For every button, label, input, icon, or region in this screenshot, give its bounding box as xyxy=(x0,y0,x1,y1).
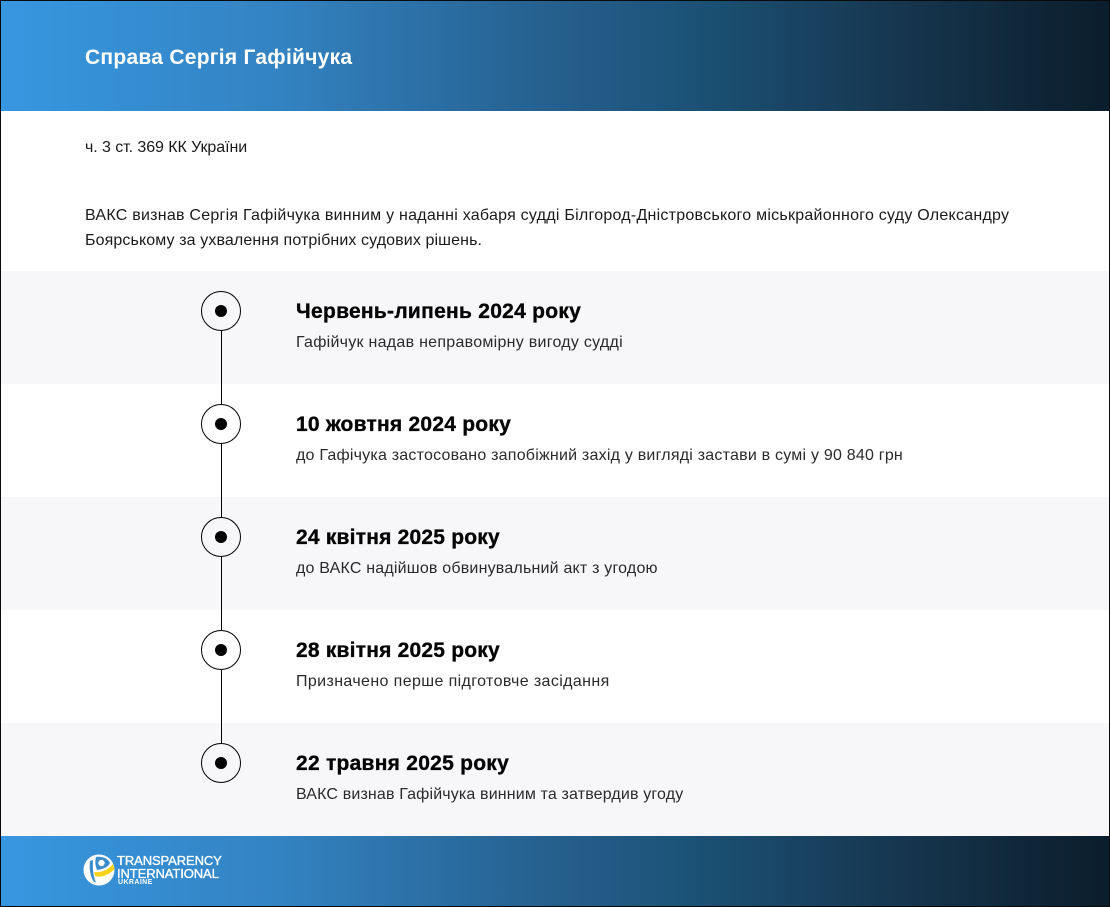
band: row 5 background xyxy=(0,723,1110,836)
timeline event 1 xyxy=(201,291,623,351)
icon: logo globe xyxy=(84,854,114,886)
legal article reference: ч. 3 ст. 369 КК України xyxy=(85,139,247,156)
footer banner xyxy=(0,836,1110,907)
event 3 description: до ВАКС надійшов обвинувальний акт з угодою xyxy=(296,560,658,577)
band: row 1 background xyxy=(0,271,1110,384)
title: Справа Сергія Гафійчука xyxy=(85,46,352,69)
marker 1 xyxy=(201,291,241,331)
case summary xyxy=(85,207,1009,249)
event 3 date: 24 квітня 2025 року xyxy=(296,526,500,549)
event 2 date: 10 жовтня 2024 року xyxy=(296,413,511,436)
logo: Transparency International Ukraine xyxy=(84,853,222,886)
logo wordmark: TRANSPARENCY xyxy=(117,853,222,868)
case summary: ВАКС визнав Сергія Гафійчука винним у наданні хабаря судді Білгород-Дністровського міськрайонного суду Олександру xyxy=(85,207,1009,224)
timeline event 5 xyxy=(201,743,684,803)
logo wordmark: INTERNATIONAL xyxy=(117,866,219,880)
event 1 date: Червень-липень 2024 року xyxy=(296,300,581,323)
case summary: Боярському за ухвалення потрібних судових рішень. xyxy=(85,232,482,249)
marker 2 xyxy=(201,404,241,444)
event 5 date: 22 травня 2025 року xyxy=(296,752,509,775)
timeline connector line xyxy=(221,311,222,763)
band: row 3 background xyxy=(0,497,1110,610)
marker 3 xyxy=(201,517,241,557)
header banner xyxy=(0,0,1110,111)
event 4 description: Призначено перше підготовче засідання xyxy=(296,673,610,690)
logo subtitle: UKRAINE xyxy=(118,879,153,886)
event 2 description: до Гафічука застосовано запобіжний захід у вигляді застави в сумі у 90 840 грн xyxy=(296,447,903,464)
marker 5 xyxy=(201,743,241,783)
logo wordmark xyxy=(117,853,222,880)
timeline event 3 xyxy=(201,517,658,577)
event 1 description: Гафійчук надав неправомірну вигоду судді xyxy=(296,334,623,351)
marker 4 xyxy=(201,630,241,670)
event 4 date: 28 квітня 2025 року xyxy=(296,639,500,662)
timeline event 2 xyxy=(201,404,903,464)
event 5 description: ВАКС визнав Гафійчука винним та затвердив угоду xyxy=(296,786,683,803)
timeline event 4 xyxy=(201,630,610,690)
